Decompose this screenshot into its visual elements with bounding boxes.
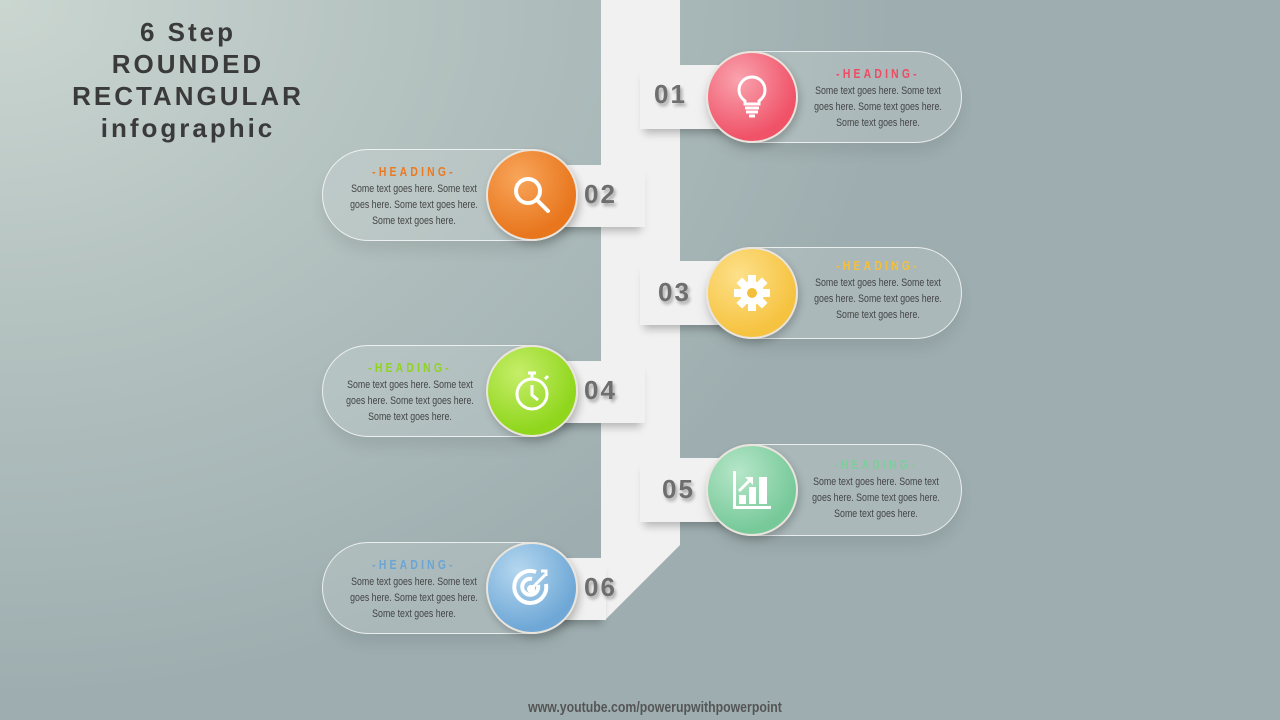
- pill: [706, 51, 962, 143]
- title: 6 Step: [140, 17, 236, 47]
- title: ROUNDED: [112, 49, 264, 79]
- step 05: -HEADING-: [834, 457, 918, 472]
- icon: magnifier: [486, 149, 578, 241]
- number: 01: [654, 79, 687, 109]
- step 02: -HEADING-: [372, 164, 456, 179]
- step 03: 03: [658, 277, 691, 307]
- icon: stopwatch: [486, 345, 578, 437]
- icon: gear: [706, 247, 798, 339]
- step 05: Some text goes here. Some text goes here. Some text goes here. Some text goes here.: [812, 476, 940, 520]
- tab: [640, 65, 730, 129]
- step 02: 02: [584, 179, 617, 209]
- footer url: www.youtube.com/powerupwithpowerpoint: [528, 699, 782, 716]
- step 04: -HEADING-: [368, 360, 452, 375]
- text: -HEADING-: [836, 66, 920, 81]
- icon: lightbulb: [706, 51, 798, 143]
- step 02: [322, 149, 646, 252]
- text: Some text goes here. Some text goes here. Some text goes here. Some text goes here.: [814, 85, 942, 129]
- step 02: Some text goes here. Some text goes here. Some text goes here. Some text goes here.: [350, 183, 478, 227]
- title: RECTANGULAR: [72, 81, 304, 111]
- icon: target: [486, 542, 578, 634]
- step 06: [322, 542, 618, 644]
- step 06: Some text goes here. Some text goes here. Some text goes here. Some text goes here.: [350, 576, 478, 620]
- icon: bar chart: [706, 444, 798, 536]
- step 06: 06: [584, 572, 617, 602]
- step 05: [640, 444, 962, 546]
- step 06: -HEADING-: [372, 557, 456, 572]
- step 04: 04: [584, 375, 617, 405]
- title: [72, 17, 304, 143]
- step 05: 05: [662, 474, 695, 504]
- step 04: Some text goes here. Some text goes here. Some text goes here. Some text goes here.: [346, 379, 474, 423]
- text: [814, 66, 942, 129]
- step 03: -HEADING-: [836, 258, 920, 273]
- step 03: [640, 247, 962, 350]
- step 01: [640, 51, 962, 154]
- step 04: [322, 345, 646, 448]
- title: infographic: [101, 113, 275, 143]
- step 03: Some text goes here. Some text goes here. Some text goes here. Some text goes here.: [814, 277, 942, 321]
